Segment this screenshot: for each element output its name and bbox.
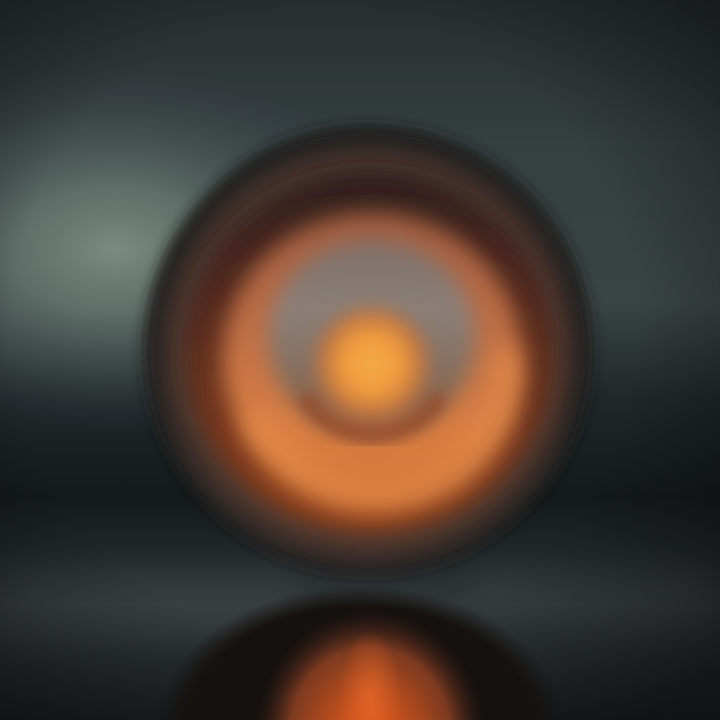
brown arc under core (305, 395, 440, 434)
bright lower-right arc (255, 350, 507, 497)
reflection: rings mirrored on the surface (150, 585, 570, 720)
disc: concentric blurred rings (144, 126, 592, 574)
red-brown band (186, 172, 554, 532)
outer dark rim (144, 126, 592, 574)
rim highlight (160, 146, 576, 562)
orange ring (222, 212, 522, 504)
grey inner field (268, 240, 476, 436)
glowing core (306, 298, 438, 430)
